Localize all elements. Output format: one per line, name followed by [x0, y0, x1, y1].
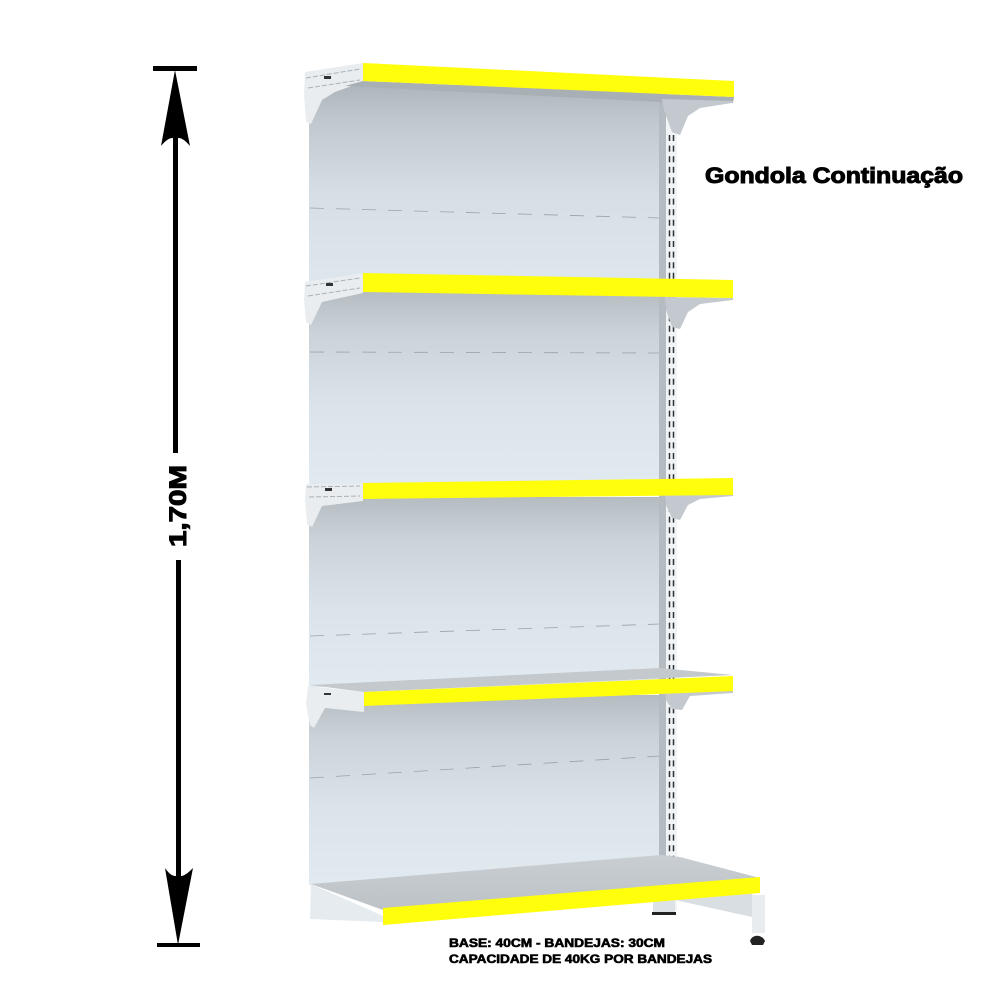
height label: 1,70M — [165, 465, 192, 547]
height dimension arrow — [153, 66, 200, 947]
specifications: CAPACIDADE DE 40KG POR BANDEJAS — [449, 954, 712, 966]
back panel — [309, 85, 661, 885]
specifications: BASE: 40CM - BANDEJAS: 30CM — [449, 938, 665, 950]
shelf 3 — [305, 478, 733, 527]
product title: Gondola Continuação — [705, 163, 963, 188]
shelf 4 — [306, 668, 733, 728]
shelf 2 — [304, 273, 733, 329]
specifications — [449, 938, 712, 966]
shelf 1 (top) — [304, 63, 734, 135]
upright column — [659, 96, 677, 911]
base shelf — [310, 855, 765, 945]
